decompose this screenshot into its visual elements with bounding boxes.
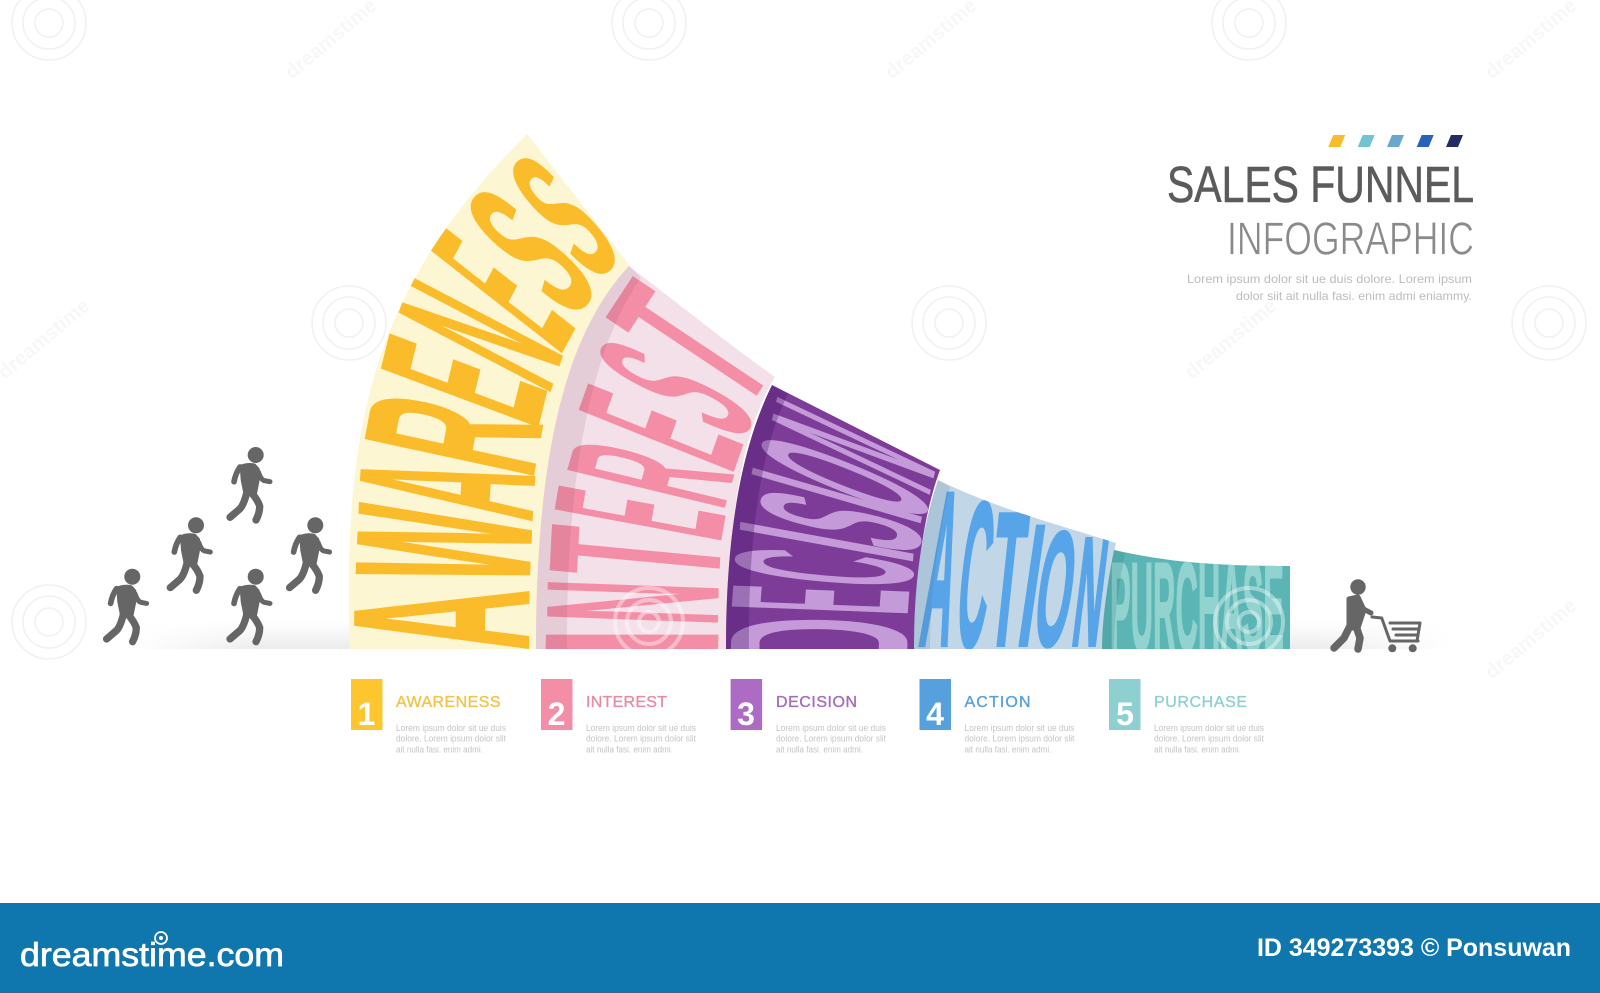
legend item 3 [731,679,886,756]
legend item 4: ACTION [964,694,1030,711]
funnel segment: interest: R [518,424,784,523]
legend item 2: 2 [548,696,565,732]
funnel segment: action [914,480,1116,649]
funnel segment: interest: N [495,576,772,629]
funnel segment: awareness: S [428,151,635,352]
legend item 2: ait nulla fasi. enim admi. [586,744,673,756]
intro text: dolor siit ait nulla fasi. enim admi eniammy. [1236,289,1472,303]
funnel segment: awareness: E [383,188,617,388]
legend item 2: Lorem ipsum dolor sit ue duis [586,723,696,734]
legend item 1 [351,679,506,756]
funnel segment: action: N [1066,506,1115,678]
legend item 2: dolore. Lorem ipsum dolor slit [586,734,696,744]
funnel segment: decision: E [676,581,964,618]
funnel segment: awareness: E [333,312,595,449]
funnel segment: interest: T [496,518,774,592]
funnel segment: decision: I [697,449,975,541]
legend item 1: AWARENESS [396,694,500,711]
person with shopping cart [1334,579,1420,652]
legend item 5: dolore. Lorem ipsum dolor slit [1154,734,1264,744]
title: INFOGRAPHIC [1227,212,1474,264]
legend item 3: Lorem ipsum dolor sit ue duis [776,723,886,734]
legend item 3: dolore. Lorem ipsum dolor slit [776,734,886,744]
funnel segment: interest: T [561,246,817,441]
funnel segment: decision: N [721,370,985,521]
funnel segment: action: O [1026,499,1086,680]
legend item 1: 1 [358,696,375,732]
footer image id: ID 349273393 © Ponsuwan [1257,934,1571,962]
legend item 1: dolore. Lorem ipsum dolor slit [396,734,506,744]
funnel segment: decision [726,385,940,649]
funnel segment: decision: D [675,615,963,665]
funnel segment: action: T [981,473,1035,686]
funnel segment: interest: I [491,627,772,657]
legend item 4 [920,679,1075,756]
footer logo: dreamstime.com [20,936,284,973]
intro text [1187,272,1472,303]
funnel segment: purchase: PURCHASE [1110,539,1284,677]
funnel segment: awareness: A [300,587,582,651]
funnel segment: interest: E [530,361,793,495]
legend item 3: ait nulla fasi. enim admi. [776,744,863,756]
legend item 4: dolore. Lorem ipsum dolor slit [964,734,1075,744]
legend item 4: Lorem ipsum dolor sit ue duis [964,723,1075,734]
legend item 2: INTEREST [586,694,667,711]
floor shadow [187,633,1388,649]
legend item 5: Lorem ipsum dolor sit ue duis [1154,723,1264,734]
title [1167,156,1474,264]
funnel segment: purchase [1102,550,1290,649]
funnel segment: decision: O [711,409,980,545]
funnel segment: interest [536,266,775,649]
funnel segment: action: I [1010,490,1054,682]
funnel segment: awareness [348,134,631,649]
funnel segment: awareness: A [305,444,587,530]
legend item 3: 3 [737,696,755,732]
footer bar [0,903,1600,993]
funnel segment: decision: C [680,540,968,596]
funnel segment: awareness: N [352,249,611,420]
funnel segment: action: C [949,460,1003,690]
people walking toward funnel [107,447,330,642]
funnel segment: awareness: R [314,376,595,492]
funnel segment: decision: S [708,471,972,571]
legend item 4: ait nulla fasi. enim admi. [964,744,1052,756]
infographic canvas: dreamstime [1481,595,1581,684]
funnel segment: decision: I [687,509,968,575]
title: SALES FUNNEL [1167,156,1474,213]
legend item 1: Lorem ipsum dolor sit ue duis [396,723,506,734]
legend item 5: ait nulla fasi. enim admi. [1154,744,1241,756]
infographic canvas: dreamstime [1181,295,1281,384]
legend item 2 [541,679,696,756]
legend item 5: 5 [1116,696,1134,732]
legend item 1: ait nulla fasi. enim admi. [396,744,483,756]
funnel segment: action: A [913,446,971,692]
legend item 3: DECISION [776,694,857,711]
intro text: Lorem ipsum dolor sit ue duis dolore. Lorem ipsum [1187,272,1472,286]
legend item 4: 4 [926,696,944,732]
funnel segment: interest: S [549,308,802,467]
funnel segment: interest: E [502,473,778,553]
legend item 5 [1109,679,1264,756]
colour dashes above title [1328,135,1463,147]
funnel segment: awareness: W [304,498,586,593]
legend item 5: PURCHASE [1154,694,1247,711]
funnel segment: awareness: S [476,118,652,315]
